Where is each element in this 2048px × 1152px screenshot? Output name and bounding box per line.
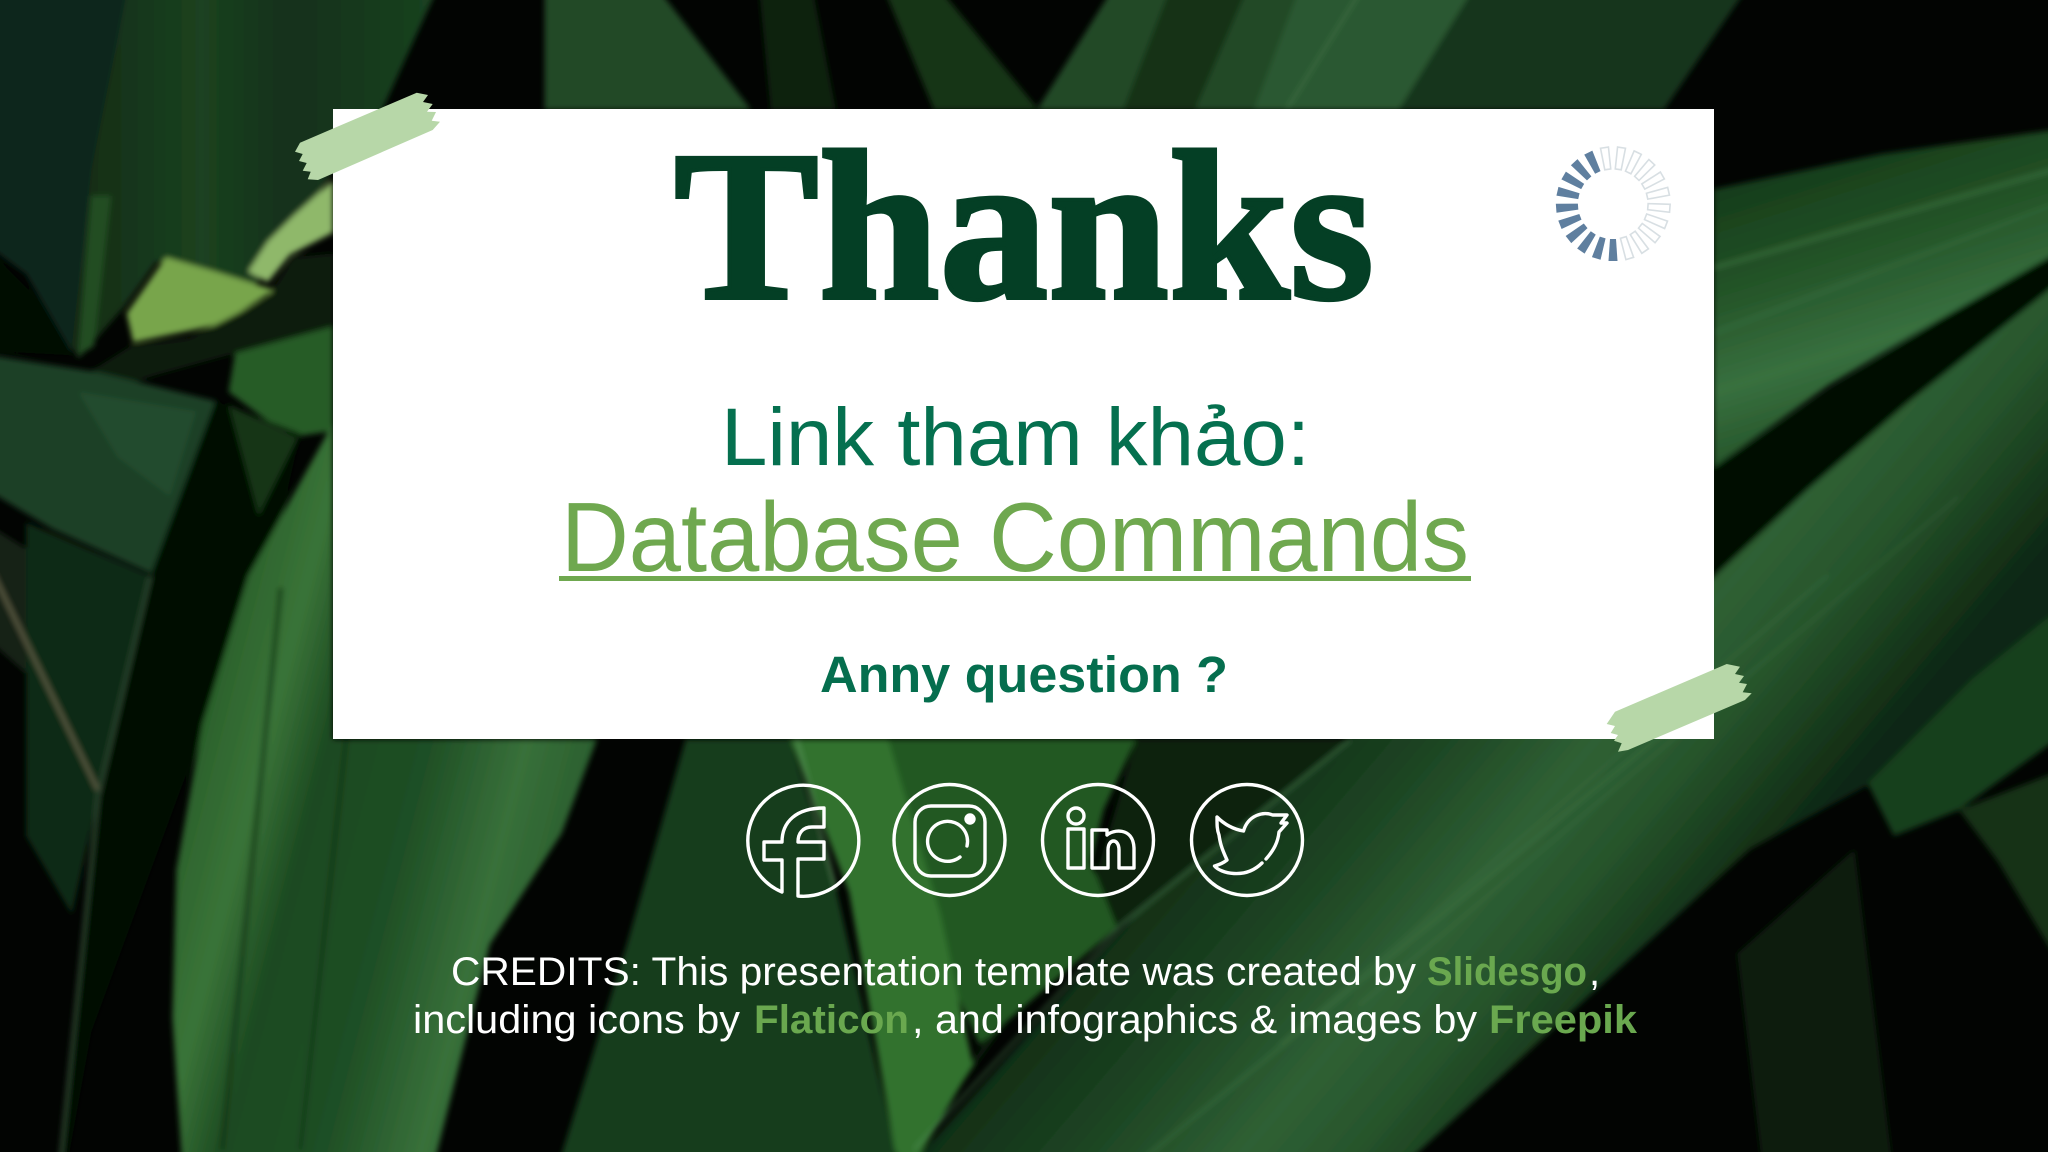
icon: linkedin	[1042, 784, 1154, 896]
big diagonal leaf	[901, 268, 2048, 1152]
credits text: ,	[1589, 950, 1600, 994]
tape: top left	[295, 93, 440, 180]
link: Database Commands: Database Commands	[561, 482, 1469, 592]
right leaf	[1714, 127, 2048, 468]
credits text	[413, 950, 1638, 1042]
title: Thanks	[674, 108, 1374, 345]
tape: bottom right	[1607, 664, 1752, 752]
credits text: CREDITS: This presentation template was created by	[451, 950, 1416, 994]
credits text: Freepik	[1489, 998, 1638, 1042]
icon: loading spinner	[1556, 147, 1670, 261]
panel: white card	[333, 109, 1714, 739]
bottom-centre leaves	[555, 739, 901, 1152]
credits text: including icons by	[413, 998, 740, 1042]
text: question: Anny question ?	[820, 646, 1228, 703]
icon: twitter	[1192, 784, 1302, 896]
mid-left leaves	[0, 353, 216, 576]
leaf veins and highlights	[914, 739, 1351, 1149]
credits text: Flaticon	[754, 998, 909, 1042]
credits text: Slidesgo	[1427, 950, 1587, 994]
subtitle: link heading: Link tham khảo:	[721, 392, 1310, 483]
lower-left big leaf	[172, 423, 597, 1152]
credits text: , and infographics & images by	[912, 998, 1477, 1042]
icon: facebook	[748, 785, 859, 896]
icon: instagram	[894, 784, 1005, 896]
social icons	[748, 784, 1302, 896]
upper-left small leaves	[229, 327, 333, 438]
